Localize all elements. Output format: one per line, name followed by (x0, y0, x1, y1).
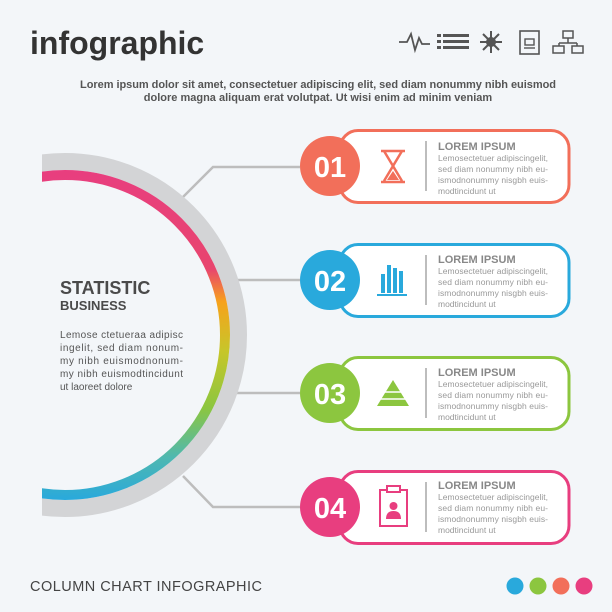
title: infographic (30, 25, 204, 61)
footer title: COLUMN CHART INFOGRAPHIC (30, 579, 262, 595)
card 3: sed diam nonummy nibh eu- (438, 390, 548, 400)
center text: ingelit, sed diam nonum- (60, 343, 183, 354)
card 4: 04 (314, 493, 346, 525)
big arc (0, 162, 238, 508)
footer dots (506, 578, 592, 594)
card 2: ismodnonummy nisgbh euis- (438, 288, 548, 298)
card 2: modtincidunt ut (438, 299, 496, 309)
card 4: modtincidunt ut (438, 525, 496, 535)
card 2: sed diam nonummy nibh eu- (438, 277, 548, 287)
center text: BUSINESS (60, 298, 127, 313)
center text: my nibh euismodtincidunt (60, 369, 183, 380)
card 1: LOREM IPSUM (438, 141, 516, 153)
card 1: 01 (314, 152, 346, 184)
card 4: ismodnonummy nisgbh euis- (438, 514, 548, 524)
center text: ut laoreet dolore (60, 382, 133, 393)
center text: STATISTIC (60, 278, 150, 298)
card 2: Lemosectetuer adipiscingelit, (438, 266, 548, 276)
card 4: Lemosectetuer adipiscingelit, (438, 492, 548, 502)
card 1: sed diam nonummy nibh eu- (438, 164, 548, 174)
card 3: modtincidunt ut (438, 412, 496, 422)
card 4: sed diam nonummy nibh eu- (438, 503, 548, 513)
card 1: ismodnonummy nisgbh euis- (438, 175, 548, 185)
card 1: modtincidunt ut (438, 186, 496, 196)
card 4: LOREM IPSUM (438, 480, 516, 492)
subtitle: Lorem ipsum dolor sit amet, consectetuer adipiscing elit, sed diam nonummy nibh euismod (80, 79, 556, 91)
card 3: ismodnonummy nisgbh euis- (438, 401, 548, 411)
card 1 (300, 130, 569, 202)
card 3: Lemosectetuer adipiscingelit, (438, 379, 548, 389)
text: dolore magna aliquam erat volutpat. Ut wisi enim ad minim veniam (144, 92, 492, 104)
center text: my nibh euismodnonum- (60, 356, 183, 367)
card 2 (300, 244, 569, 316)
card 3: 03 (314, 379, 346, 411)
card 3 (300, 358, 569, 430)
card 2: 02 (314, 266, 346, 298)
card 2: LOREM IPSUM (438, 254, 516, 266)
card 1: Lemosectetuer adipiscingelit, (438, 153, 548, 163)
card 4 (300, 472, 569, 544)
header icons (399, 31, 583, 54)
center text: Lemose ctetueraa adipisc (60, 330, 183, 341)
center text (60, 278, 183, 393)
connector lines (183, 167, 300, 507)
card 3: LOREM IPSUM (438, 367, 516, 379)
